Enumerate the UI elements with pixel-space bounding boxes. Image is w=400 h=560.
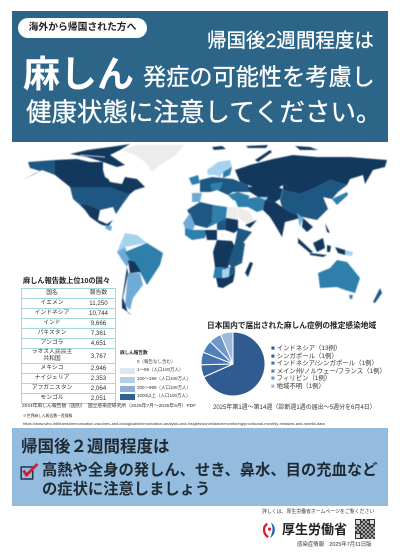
heading: measles: 麻しん: [23, 54, 134, 95]
pie legend: ■ インドネシア/シンガポール（1例）: [271, 360, 378, 367]
data table: アンゴラ: [41, 340, 63, 346]
legend swatch: medium high: [120, 386, 135, 392]
Oceania: [318, 260, 382, 303]
South America: [117, 233, 163, 315]
header panel: [12, 11, 388, 142]
legend swatch: medium low: [120, 377, 135, 383]
data table: アフガニスタン: [32, 385, 72, 391]
ministry name: 厚生労働省: [282, 522, 347, 537]
data table: インドネシア: [35, 310, 69, 316]
heading line 2: 発症の可能性を考慮し: [143, 64, 375, 90]
legend label: low: 1～99（人口100万人）: [137, 367, 184, 372]
data table: 2,946: [91, 365, 106, 372]
legend swatch: low: [120, 368, 135, 374]
legend title: 麻しん報告数: [120, 350, 148, 355]
data table: 4,651: [91, 340, 106, 347]
legend swatch: high: [120, 394, 135, 400]
table source note: 2024年麻しん報告数（国別） 国立感染症研究所（2025年7月～2025年6月）PDF: [22, 404, 196, 409]
pie title: 日本国内で届出された麻しん症例の推定感染地域: [207, 321, 376, 330]
icon: check box: [20, 463, 38, 480]
data table: 9,666: [91, 320, 106, 327]
heading line 3: 健康状態に注意してください。: [26, 99, 381, 127]
data table: イエメン: [40, 300, 64, 306]
map legend: [120, 350, 191, 400]
legend label: none: 0（報告なし含む）: [137, 359, 176, 364]
data table: 報告数: [90, 290, 107, 296]
symptoms panel: [12, 428, 388, 506]
data table: パキスタン: [38, 330, 66, 336]
North America: [22, 144, 185, 231]
data table: ラオス人民民主: [32, 349, 72, 355]
data table: 2,353: [91, 375, 106, 382]
Europe: [189, 160, 250, 202]
data table: 11,250: [89, 300, 108, 307]
data table: 共和国: [43, 356, 61, 362]
legend label: medium low: 100～199（人口100万人）: [137, 376, 191, 381]
data table: 10,744: [89, 310, 108, 317]
data table: 7,361: [91, 330, 106, 337]
data table: インド: [43, 320, 61, 326]
source url: https://www.who.int/teams/immunization-vaccines-and-biologicals/immunization-analysis-and-insights/surveillance/monitoring/provisional-monthly-measles-and-rubella-data: [23, 421, 325, 426]
source heading: ※世界麻しん報告数一覧情報: [23, 414, 72, 418]
world map: [24, 143, 388, 316]
pie chart: [202, 332, 265, 396]
table: top 10 countries: [21, 276, 116, 404]
data table: 2,064: [91, 385, 106, 392]
symptoms heading: 帰国後２週間程度は: [21, 438, 170, 456]
legend swatch: none: [120, 359, 135, 366]
data table: メキシコ: [40, 365, 64, 371]
audience pill: [18, 18, 147, 38]
icon: ministry logo: [262, 522, 275, 538]
issue date: 感染症情報 2025年7月11日版: [297, 542, 372, 548]
pie legend: ■ インドネシア（13例）: [271, 345, 341, 352]
pie legend: [271, 344, 386, 390]
data table: [21, 288, 116, 404]
symptoms text line 1: 高熱や全身の発しん、せき、鼻水、目の充血など: [42, 462, 377, 479]
symptoms text line 2: の症状に注意しましょう: [42, 481, 210, 498]
heading line 1: 帰国後2週間程度は: [207, 30, 374, 52]
legend label: high: 1000以上（人口100万人）: [137, 393, 191, 398]
pie legend: ■ シンガポール（1例）: [271, 353, 338, 360]
Africa: [183, 202, 257, 288]
audience pill: 海外から帰国された方へ: [29, 22, 136, 33]
legend label: medium high: 200～999（人口100万人）: [137, 385, 191, 390]
Russia and Asia: [212, 145, 387, 257]
table title: 麻しん報告数上位10の国々: [23, 276, 110, 285]
pie chart panel: [202, 320, 386, 411]
data table: ナイジェリア: [35, 375, 69, 381]
pie legend: ■ 地域不明（1例）: [271, 383, 325, 390]
footer: [262, 508, 375, 548]
data table: モンゴル: [40, 395, 64, 401]
data table: 3,767: [91, 352, 106, 360]
pie legend: ■ メイン州/ノルウェー/フランス（1例）: [271, 368, 386, 375]
QR code: [355, 519, 375, 539]
pie caption: 2025年第1週～第14週（診断週1週の届出～5週分を6月4日）: [213, 405, 376, 411]
data table: 国名: [46, 290, 58, 296]
pie legend: ■ フィリピン（1例）: [271, 375, 331, 382]
footer note: 詳しくは、厚生労働省ホームページをご覧ください: [262, 510, 374, 515]
data table: 2,051: [91, 395, 106, 402]
